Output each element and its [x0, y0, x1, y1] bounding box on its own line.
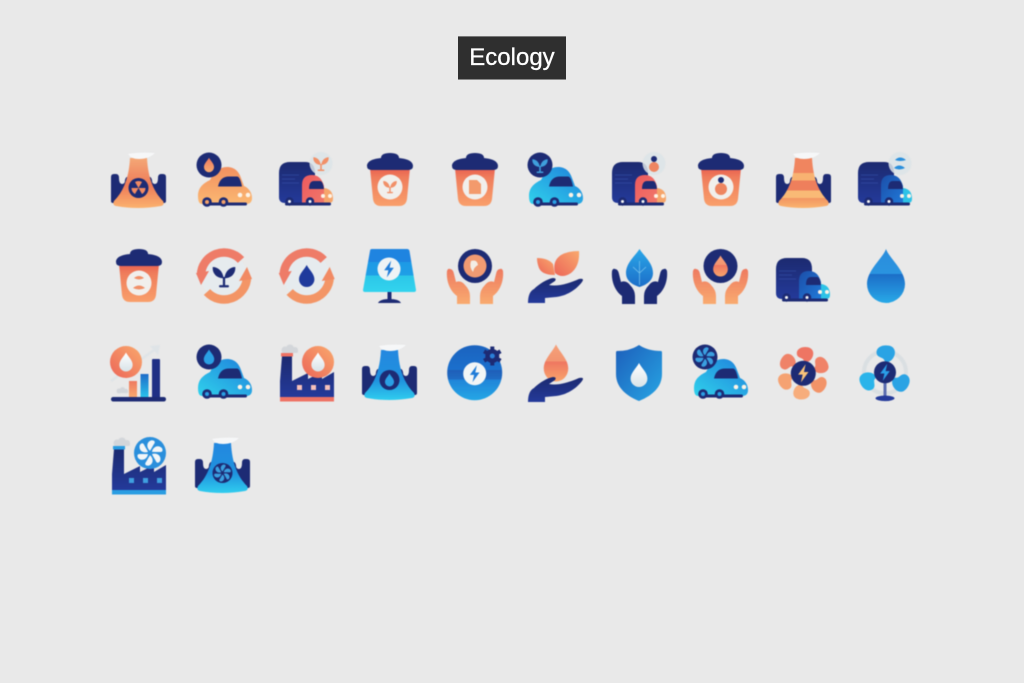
icon: bin with paper — [452, 153, 498, 206]
icon: blue cooling tower with drop — [362, 345, 417, 400]
icon: navy hands with leaf — [612, 249, 667, 304]
icon: striped cooling tower — [776, 153, 831, 208]
icon: bin with sprout — [367, 153, 413, 206]
icon: energy disc with gear — [447, 345, 502, 400]
icon: factory with fan — [112, 437, 166, 494]
icon: orange wind fan — [776, 347, 831, 400]
icon: blue truck — [776, 258, 830, 302]
icon: blue desk fan — [857, 345, 913, 401]
icon: hands holding globe — [447, 249, 503, 304]
icon: cooling tower radiation — [111, 153, 166, 208]
title — [458, 37, 566, 79]
icon: shield with drop — [616, 345, 662, 401]
icon: bin with recycle clouds — [116, 249, 162, 302]
icon: solar panel — [363, 249, 416, 303]
icon: hand with drop — [528, 344, 583, 402]
icon: blue car with sprout badge — [528, 152, 583, 207]
icon: truck with jar bubble — [612, 152, 666, 206]
icon: water drop — [867, 249, 905, 303]
icon: orange car with drop badge — [196, 152, 252, 207]
icon: truck with clouds bubble — [858, 152, 912, 206]
title: Ecology — [469, 44, 555, 71]
icon: truck with sprout bubble — [279, 152, 333, 206]
icon: growth chart with drop — [110, 345, 166, 402]
icon: blue car with fan badge — [692, 344, 748, 399]
icon: recycle sprout — [196, 252, 252, 300]
icon: recycle water drop — [279, 252, 335, 300]
icon: hand with leaves — [528, 251, 583, 303]
icon: bin with jar — [698, 153, 744, 206]
icon: factory with drop — [280, 344, 334, 402]
icon: blue car with drop badge — [196, 344, 252, 399]
icon: blue cooling tower with fan — [195, 438, 250, 493]
icon: hands holding drop — [693, 249, 748, 304]
